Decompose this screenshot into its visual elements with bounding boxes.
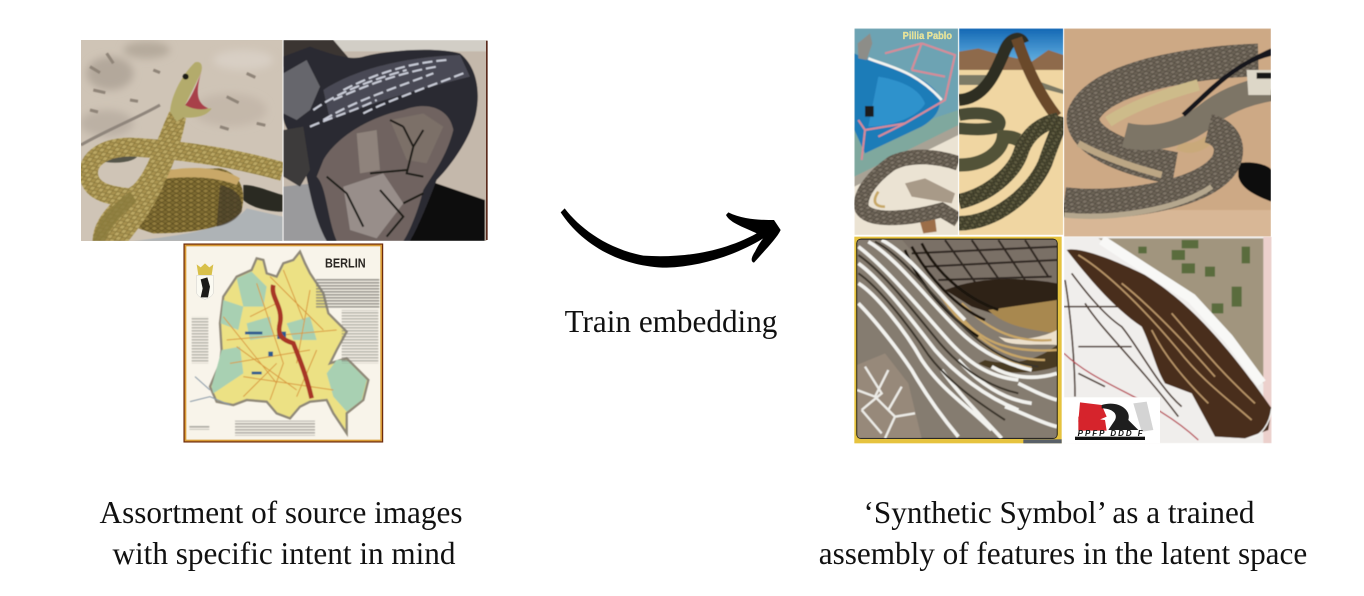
image: snake on sand <box>80 40 283 241</box>
caption: synthetic symbol: assembly of features in the latent space <box>819 536 1307 571</box>
image: map and snake <box>854 28 958 235</box>
label: train embedding: Train embedding <box>565 304 777 339</box>
caption: synthetic symbol: ‘Synthetic Symbol’ as a trained <box>864 495 1255 530</box>
logo box: PPFP DDD F <box>1078 429 1144 438</box>
image edge strip <box>486 41 488 240</box>
image: Berlin map poster <box>183 243 383 443</box>
image: abstract scale stripes <box>854 237 1062 443</box>
caption: source images: Assortment of source images <box>100 495 462 530</box>
caption: source images <box>100 495 462 571</box>
image: large snake on sand <box>1064 28 1271 237</box>
source images group <box>80 40 488 443</box>
map territory <box>189 252 379 436</box>
map title: BERLIN <box>325 256 366 270</box>
arrow <box>561 208 781 268</box>
icon: Berlin crest <box>197 263 213 299</box>
caption: source images: with specific intent in mind <box>112 536 456 571</box>
logo box <box>1064 397 1160 443</box>
caption: synthetic symbol <box>819 495 1307 571</box>
generated map title: Pillia Pablo <box>903 31 952 42</box>
generated images group <box>854 28 1272 443</box>
image: coal rock <box>283 40 487 241</box>
image: snake in desert <box>959 28 1063 235</box>
image: aerial map with brown band <box>1064 237 1272 443</box>
